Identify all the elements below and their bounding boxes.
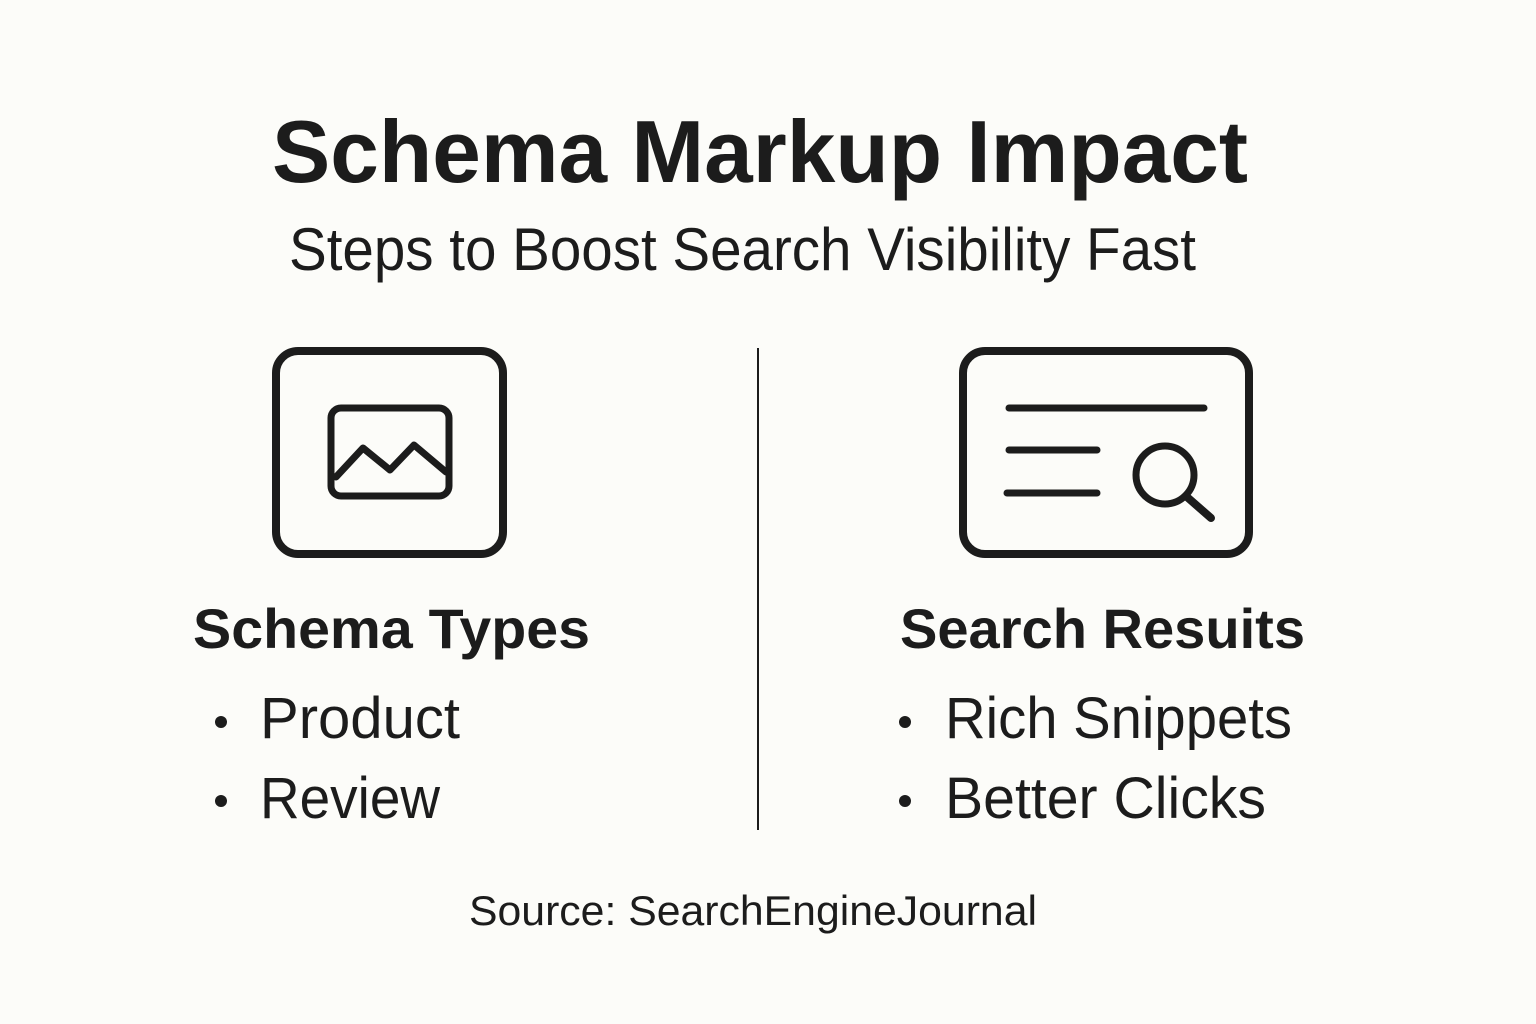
icon: image — [276, 351, 503, 554]
panel: schema types: Schema Types — [193, 597, 590, 660]
panel: search results: Search Resuits — [900, 597, 1305, 660]
panel: schema types: Product — [260, 686, 460, 751]
panel: schema types — [193, 597, 590, 831]
title: Schema Markup Impact — [272, 102, 1248, 201]
icon: search results — [963, 351, 1249, 554]
panel: search results: Rich Snippets — [945, 686, 1292, 751]
divider — [757, 348, 759, 830]
source: Source: SearchEngineJournal — [469, 887, 1037, 934]
panel: schema types: Review — [260, 766, 441, 831]
panel: search results: Better Clicks — [945, 766, 1266, 831]
panel: search results — [899, 597, 1305, 831]
subtitle: Steps to Boost Search Visibility Fast — [289, 216, 1196, 283]
